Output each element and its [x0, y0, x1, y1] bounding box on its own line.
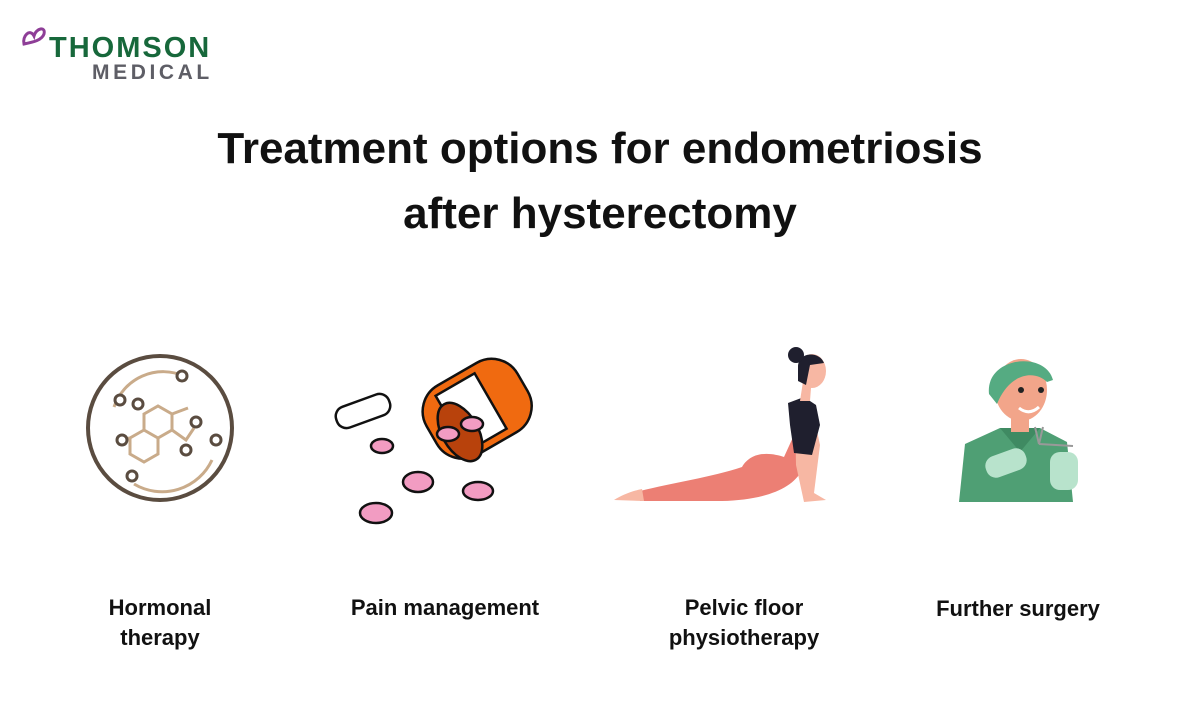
logo text: THOMSON: [49, 32, 211, 64]
label: pelvic floor physiotherapy: physiotherapy: [669, 625, 819, 650]
icon: surgeon: [959, 359, 1078, 502]
label: hormonal therapy: therapy: [120, 625, 200, 650]
title: Treatment options for endometriosis: [217, 124, 983, 173]
logo: [22, 27, 213, 84]
title: [217, 124, 983, 238]
icon: yoga woman: [614, 347, 826, 502]
title: after hysterectomy: [403, 189, 797, 238]
icon: butterfly: [22, 27, 46, 46]
label: pelvic floor physiotherapy: [669, 595, 820, 650]
label: hormonal therapy: [109, 595, 211, 650]
label: hormonal therapy: Hormonal: [109, 595, 211, 620]
icon: pill bottle: [334, 358, 533, 524]
logo: MEDICAL: [92, 61, 213, 84]
label: pain management: Pain management: [351, 595, 539, 620]
label: pelvic floor physiotherapy: Pelvic floor: [685, 595, 803, 620]
icon: hormone molecule: [86, 354, 234, 502]
label: further surgery: Further surgery: [936, 596, 1100, 621]
